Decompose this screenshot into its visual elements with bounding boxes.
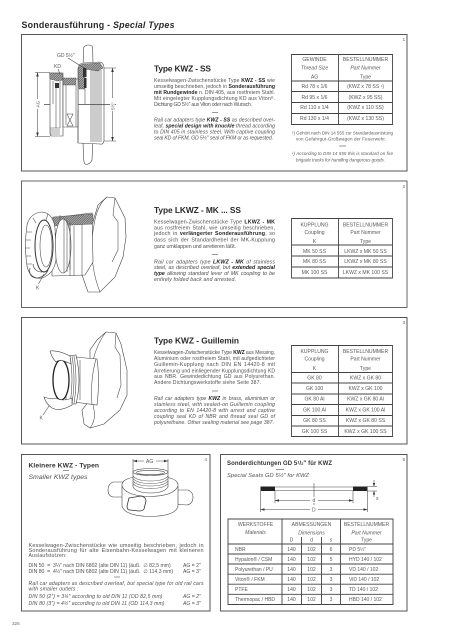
panel number 3: 3: [402, 320, 406, 326]
text: English description: DIN 80 (3″) = 4½″ according to old DIN 11 (OD 114,3 mm): [28, 600, 165, 607]
diagram: Guillemin coupling: [40, 332, 127, 428]
table: thread sizes: (KWZ x 110 SS): [347, 105, 384, 111]
table: materials: 5: [330, 557, 333, 563]
heading: Type LKWZ - MK ... SS: [154, 205, 241, 215]
table: thread sizes: Rd 110 x 1/4: [300, 105, 329, 111]
text: German description: Guillemin-Kupplung nach DIN EN 14420-8 mit: [154, 362, 276, 368]
table: Guillemin couplings: GK 80 Al: [304, 396, 325, 402]
text: English description: [154, 260, 276, 283]
diagram: gasket: [260, 480, 379, 513]
table: thread sizes: (KWZ x 78 SS ¹): [347, 84, 384, 90]
table: materials: 3: [330, 567, 333, 573]
text: German description: Auslaufstutzen:: [28, 553, 66, 559]
text: German description: jedoch in verlängerter Sonderausführung, so: [153, 231, 275, 237]
table: MK couplings: MK 80 SS: [303, 259, 327, 265]
heading: Type KWZ - SS: [154, 64, 211, 74]
heading: special seals: 2″ für KWZ: [301, 461, 332, 467]
table: MK couplings: MK 50 SS: [303, 249, 327, 255]
text: German description: Mit eingelegter Kupplungsdichtung KD aus Viton: [154, 96, 271, 102]
text: German description: Kesselwagen-Zwischenstücke Type KWZ - SS wie: [154, 78, 275, 84]
text: German description: [154, 350, 276, 386]
table: thread sizes: (KWZ x 95 SS): [349, 95, 383, 101]
page number: 326: [12, 621, 20, 626]
diagram: gasket: s: [376, 496, 379, 502]
text: German description: DIN 50 = 3¼″ nach DIN 6802 (alte DIN 11) (äuß. ∅ 82,5 mm): [28, 563, 171, 569]
text: German description: Kesselwagen-Zwischenstücke Type KWZ aus Messing,: [154, 350, 275, 356]
text: English description: Rail car adapters type KWZ in brass, aluminium or: [154, 396, 275, 402]
table: materials: 140: [287, 597, 296, 603]
text: English description: Rail car adapters type LKWZ - MK of stainless: [154, 260, 275, 266]
text: English description: according to EN 14420-8 with arrest and captive: [154, 408, 275, 414]
text: German description: Arretierung und einliegender Kupplungsdichtung KD: [154, 368, 275, 374]
subheading: Smaller KWZ types: [28, 474, 88, 481]
text: English description: coupling seal KD of NBR and thread seal GD of: [154, 414, 276, 420]
table: Guillemin couplings: KWZ x GK 100 Al: [346, 408, 385, 414]
heading: smaller types: Kleinere KWZ - Typen: [28, 462, 99, 470]
text: German description: [154, 78, 275, 108]
table: materials: NBR: [235, 547, 246, 553]
heading: special seals: 1: [297, 461, 299, 465]
footnotes: [292, 130, 393, 163]
label GD: GD 5½″: [57, 52, 75, 59]
label K: K: [36, 286, 40, 292]
text: English description: DIN 50 (2″) = 3¼″ according to old DIN 11 (OD 82,5 mm): [28, 594, 163, 600]
table: thread sizes: Rd 78 x 1/6: [301, 84, 328, 90]
panel: Type KWZ-SS: [22, 34, 407, 171]
table: MK couplings: Coupling: [304, 230, 325, 236]
table: materials: 102: [307, 587, 316, 593]
heading: Type KWZ - Guillemin: [154, 336, 239, 346]
table: thread sizes: Type: [360, 74, 371, 80]
table: materials: 140: [287, 547, 296, 553]
text: English description: Rail car adapters type KWZ - SS as described over-: [154, 117, 275, 123]
table: thread sizes: GEWINDE: [302, 57, 327, 63]
table: MK couplings: LKWZ x MK 50 SS: [344, 249, 387, 255]
table: materials: 102: [307, 577, 316, 583]
text: German description: umseitig beschrieben, jedoch in Sonderausführung: [154, 84, 275, 90]
text: English description: leaf, special design with knuckle thread according: [154, 124, 275, 130]
text: German description: Dichtung GD 5½″ aus Viton oder nach Wunsch.: [154, 101, 252, 108]
panel number 2: 2: [402, 184, 406, 190]
diagram: fitting with AG dimension: [108, 459, 193, 516]
table: Guillemin couplings: Part Nummer: [350, 356, 381, 362]
table: Guillemin couplings: GK 100: [306, 386, 323, 392]
panel: smaller KWZ types: [22, 454, 210, 611]
table: materials: Thermopac / HBD: [235, 597, 275, 603]
text: English description: steel, as described overleaf, but extended special: [154, 265, 276, 271]
table: materials: Materials: [245, 530, 266, 536]
table: materials: 102: [307, 547, 316, 553]
table: materials: HBD 140 / 102: [349, 597, 382, 603]
table: materials: ViD 140 / 102: [349, 577, 379, 583]
footnotes: ¹) Gehört nach DIN 14 555 zur Standardausrüstung: [292, 130, 393, 135]
table: materials: Viton® / FKM: [235, 576, 265, 583]
text: English description: type allowing standard lever of MK coupling to be: [154, 271, 275, 277]
text: German description: Sonderausführung für alte Eisenbahn-Kesselwagen mit kleineren: [28, 548, 204, 554]
table: Guillemin couplings: GK 80 SS: [303, 418, 326, 424]
table: materials: 3: [330, 587, 333, 593]
table: materials: 3: [330, 597, 333, 603]
table: materials: Dimensions: [298, 530, 325, 536]
panel number 4: 4: [204, 457, 208, 463]
text: German description: aus NBR. Gewindedichtung GD aus Polyurethan.: [154, 374, 275, 380]
text: German description: Kesselwagen-Zwischenstücke Type LKWZ - MK: [154, 220, 275, 226]
text: German description: DIN 80 = 4½″ nach DIN 6802 (alte DIN 11) (äuß. ∅ 114,3 mm): [28, 568, 173, 575]
table: materials: D: [290, 538, 294, 544]
table: materials: PTFE: [235, 587, 248, 593]
panel number 1: 1: [402, 37, 406, 43]
table: MK couplings: BESTELLNUMMER: [343, 222, 388, 228]
table: MK couplings: MK 100 SS: [302, 270, 328, 276]
table: thread sizes: Rd 95 x 1/6: [301, 95, 328, 101]
text: German description: AG = 2″: [183, 563, 201, 569]
table: materials: s: [330, 538, 333, 544]
text: English description: polyurethane. Other sealing material see page 387.: [153, 420, 274, 426]
table: materials: BESTELLNUMMER: [344, 522, 389, 528]
table: materials: Hypalon® / CSM: [235, 556, 272, 563]
diagram: section view of KWZ-SS: [35, 45, 116, 164]
table: Guillemin couplings: [292, 346, 392, 436]
table: materials: 140: [287, 557, 296, 563]
table: materials: 102: [307, 597, 316, 603]
subheading: Special Seats GD 5½″ for KWZ: [227, 472, 310, 479]
table: materials: VD 140 / 102: [349, 567, 378, 573]
text: German description: dass sich der Standardhebel der MK-Kupplung: [154, 238, 275, 244]
AG dimension: AG: [36, 100, 40, 108]
table: Guillemin couplings: GK 100 Al: [303, 408, 326, 414]
table: materials: 102: [307, 557, 316, 563]
panel number 5: 5: [402, 457, 406, 463]
table: MK couplings: LKWZ x MK 100 SS: [343, 270, 389, 276]
text: English description: AG = 3″: [182, 601, 201, 607]
text: English description: Rail car adapters as described overleaf, but special type for old rail cars: [28, 581, 204, 587]
table: materials: WERKSTOFFE: [238, 522, 274, 528]
table: materials: 102: [307, 567, 316, 573]
text: German description: ®: [271, 96, 274, 100]
table: Guillemin couplings: Coupling: [304, 356, 325, 362]
text: German description: Andere Dichtungswerkstoffe siehe Seite 387.: [154, 380, 261, 386]
table: Guillemin couplings: KUPPLUNG: [300, 349, 329, 355]
heading: special seals: Sonderdichtungen GD 5: [227, 461, 297, 467]
table: thread sizes: BESTELLNUMMER: [343, 57, 388, 63]
footnotes: von Gefahrgut-Großwagen der Feuerwehr.: [296, 136, 386, 141]
label KD: KD: [54, 64, 61, 70]
table: thread sizes: Rd 130 x 1/4: [300, 116, 329, 122]
table: materials: [228, 519, 393, 604]
table: Guillemin couplings: GK 100 SS: [302, 429, 328, 435]
table: Guillemin couplings: KWZ x GK 100: [349, 386, 383, 392]
table: MK couplings: K: [313, 239, 317, 245]
panel: special seats: [220, 454, 407, 611]
text: German description: aus rostfreiem Stahl, wie umseitig beschrieben,: [154, 226, 275, 232]
diagram: gasket: d: [312, 498, 316, 504]
table: MK couplings: KUPPLUNG: [300, 222, 329, 228]
text: English description: to DIN 405 in stainless steel. With captive coupling: [154, 130, 275, 136]
table: thread sizes: Thread Size: [301, 66, 328, 72]
table: materials: HYD 140 / 102: [349, 557, 382, 563]
footnotes: ¹) According to DIN 14 555 this is standard on fire: [292, 151, 393, 156]
panel: Type KWZ-Guillemin: [22, 318, 407, 444]
table: Guillemin couplings: KWZ x GK 80 SS: [346, 418, 386, 424]
table: Guillemin couplings: KWZ x GK 80: [350, 376, 381, 382]
table: thread sizes: [292, 54, 392, 124]
table: materials: 140: [287, 577, 296, 583]
table: thread sizes: (KWZ x 130 SS): [347, 116, 384, 122]
table: MK couplings: [292, 218, 392, 278]
table: Guillemin couplings: K: [313, 366, 317, 372]
footnotes: brigade trucks for handling dangerous goods.: [296, 158, 385, 163]
table: materials: 140: [287, 567, 296, 573]
5½ dimension: 5½″: [110, 102, 116, 110]
text: German description: Aluminium oder rostfreiem Stahl, mit aufgedichteter: [154, 356, 275, 362]
text: German description: ganz umklappen und arretieren läßt.: [154, 244, 236, 250]
table: Guillemin couplings: KWZ x GK 100 SS: [344, 429, 387, 435]
title: Sonderausführung - Special Types: [22, 20, 175, 30]
panel: Type LKWZ-MK: [22, 181, 407, 308]
table: MK couplings: Type: [360, 239, 371, 245]
text: English description: seal KD of FKM, GD 5½″ seal of FKM or as requested.: [154, 134, 273, 142]
table: materials: 3: [330, 577, 333, 583]
table: Guillemin couplings: GK 80: [307, 376, 322, 382]
table: materials: Part Nummer: [351, 530, 382, 536]
text: English description: [153, 396, 276, 426]
text: German description: AG = 3″: [183, 569, 201, 575]
table: materials: TD 140 / 102: [349, 587, 378, 593]
label K: K: [40, 416, 44, 422]
table: Guillemin couplings: Type: [360, 366, 371, 372]
table: Guillemin couplings: KWZ x GK 80 Al: [347, 396, 384, 402]
text: English description: [28, 581, 204, 607]
diagram: LKWZ-MK coupling: [25, 197, 126, 292]
text: English description: stainless steel, with sealed-on Guillemin coupling: [154, 402, 275, 408]
table: materials: ABMESSUNGEN: [292, 522, 332, 528]
text: English description: entirely folded back and arrested.: [154, 277, 236, 283]
text: German description: [153, 220, 275, 250]
diagram: gasket: D: [312, 507, 316, 513]
table: materials: Type: [361, 538, 372, 544]
text: German description: Kesselwagen-Zwischenstücke wie umseitig beschrieben, jedoch in: [28, 543, 204, 549]
text: English description: with smaller outlets :: [28, 586, 79, 592]
text: German description: [28, 543, 204, 575]
table: MK couplings: Part Nummer: [350, 230, 381, 236]
text: English description: [154, 117, 275, 142]
table: thread sizes: AG: [311, 74, 318, 80]
diagram: fitting with AG dimension: AG: [146, 459, 153, 465]
heading: special seals: /: [300, 461, 302, 467]
table: materials: PD 5½″: [349, 546, 366, 553]
text: German description: mit Rundgewinde n. DIN 405, aus rostfreiem Stahl.: [154, 90, 275, 96]
table: materials: d: [310, 538, 313, 544]
table: materials: 6: [330, 547, 333, 553]
table: materials: Polyurethan / PU: [235, 567, 273, 573]
table: thread sizes: Part Nummer: [350, 66, 381, 72]
table: MK couplings: LKWZ x MK 80 SS: [344, 259, 387, 265]
table: Guillemin couplings: BESTELLNUMMER: [343, 349, 388, 355]
table: materials: 140: [287, 587, 296, 593]
text: German description: .: [274, 96, 275, 102]
text: English description: AG = 2″: [182, 594, 201, 600]
